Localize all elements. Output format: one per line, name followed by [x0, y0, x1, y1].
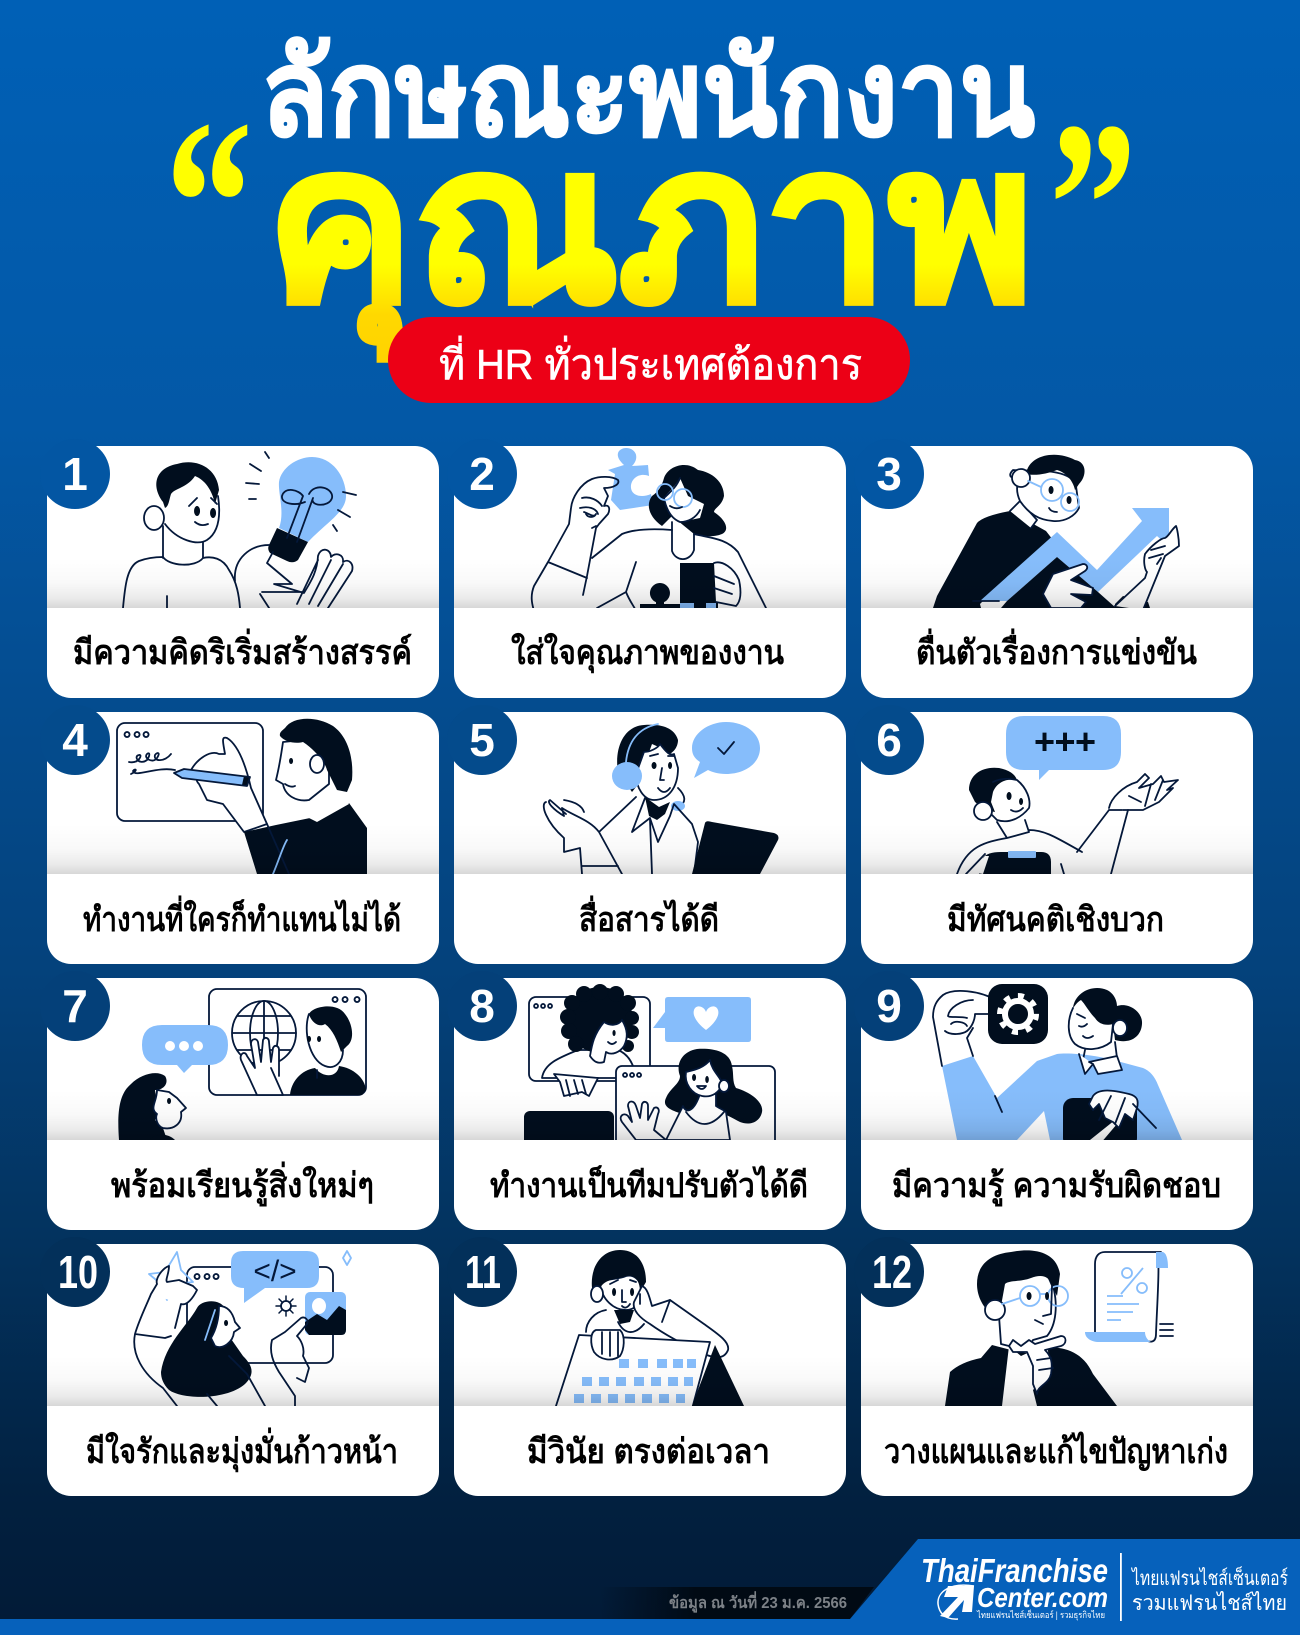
- footer: tagline: [1130, 1565, 1288, 1615]
- card 2: [447, 439, 846, 698]
- image shadow band: [454, 1090, 846, 1140]
- number badge: [40, 971, 110, 1041]
- image shadow band: [861, 1356, 1253, 1406]
- number badge: [40, 439, 110, 509]
- image shadow band: [861, 1090, 1253, 1140]
- illustration: call-centre agent: [544, 722, 778, 874]
- illustration: man leaning on calendar: [555, 1250, 744, 1409]
- number badge: 8: [469, 980, 495, 1032]
- number badge: [854, 705, 924, 775]
- illustration: team on video windows: [524, 984, 775, 1146]
- footer: logo: [921, 1552, 1108, 1621]
- footer: date band: ข้อมูล ณ วันที่ 23 ม.ค. 2566: [669, 1591, 847, 1614]
- image shadow band: [454, 558, 846, 608]
- number badge: [854, 971, 924, 1041]
- card 4: [40, 705, 439, 964]
- card 5: [447, 705, 846, 964]
- image shadow band: [861, 824, 1253, 874]
- number badge: [854, 1237, 924, 1307]
- footer: divider: [1120, 1553, 1122, 1621]
- card 12: [854, 1237, 1253, 1496]
- label: ทำงานที่ใครก็ทำแทนไม่ได้: [83, 895, 401, 939]
- image shadow band: [47, 558, 439, 608]
- number badge: [40, 705, 110, 775]
- number badge: 12: [872, 1246, 912, 1298]
- label: มีใจรักและมุ่งมั่นก้าวหน้า: [86, 1427, 398, 1473]
- image shadow band: [47, 1090, 439, 1140]
- illustration: man with light bulb: [123, 452, 356, 611]
- card 9: [854, 971, 1253, 1230]
- card 8: [447, 971, 846, 1230]
- number badge: [447, 1237, 517, 1307]
- number badge: [447, 705, 517, 775]
- footer: tagline: รวมแฟรนไชส์ไทย: [1132, 1591, 1287, 1615]
- illustration: person with gear tile: [933, 984, 1182, 1148]
- icon: logo arrow: [938, 1585, 974, 1619]
- illustration: creative woman with code window: </>: [253, 1255, 297, 1288]
- illustration: thinking man with document: [945, 1250, 1173, 1406]
- label: ใส่ใจคุณภาพของงาน: [511, 632, 784, 674]
- footer: logo: ThaiFranchise: [921, 1552, 1108, 1589]
- label: ตื่นตัวเรื่องการแข่งขัน: [916, 628, 1197, 672]
- title: closing quote: ”: [1049, 72, 1137, 338]
- subtitle pill: [388, 317, 910, 403]
- number badge: 5: [469, 714, 495, 766]
- image shadow band: [861, 558, 1253, 608]
- number badge: 1: [62, 448, 88, 500]
- illustration: positive man with speech bubble: [957, 716, 1178, 874]
- number badge: [447, 971, 517, 1041]
- number badge: 9: [876, 980, 902, 1032]
- illustration: creative woman with code window: [134, 1251, 351, 1406]
- image shadow band: [454, 824, 846, 874]
- illustration: woman with puzzle pieces: [532, 448, 766, 611]
- number badge: 4: [62, 714, 88, 766]
- label: มีความรู้ ความรับผิดชอบ: [892, 1167, 1221, 1207]
- illustration: positive man with speech bubble: +++: [1034, 721, 1096, 762]
- title: first line: ลักษณะพนักงาน: [261, 27, 1035, 161]
- number badge: [40, 1237, 110, 1307]
- label: วางแผนและแก้ไขปัญหาเก่ง: [884, 1431, 1228, 1472]
- image shadow band: [454, 1356, 846, 1406]
- label: มีวินัย ตรงต่อเวลา: [527, 1433, 770, 1471]
- number badge: 10: [58, 1246, 98, 1298]
- card 3: [854, 439, 1253, 698]
- number badge: 6: [876, 714, 902, 766]
- footer: blue strip and tab: [0, 1539, 1300, 1635]
- footer: logo: ไทยแฟรนไชส์เซ็นเตอร์ | รวมธุรกิจไทย: [976, 1608, 1105, 1621]
- title: opening quote: “: [165, 70, 253, 336]
- label: พร้อมเรียนรู้สิ่งใหม่ๆ: [111, 1161, 374, 1207]
- number badge: 11: [465, 1246, 501, 1298]
- illustration: man with rising arrow: [933, 455, 1179, 610]
- card 10: [40, 1237, 439, 1496]
- image shadow band: [47, 1356, 439, 1406]
- title: highlighted word: คุณภาพ: [266, 104, 1034, 361]
- number badge: 2: [469, 448, 495, 500]
- number badge: [854, 439, 924, 509]
- card 6: [854, 705, 1253, 964]
- label: ทำงานเป็นทีมปรับตัวได้ดี: [490, 1164, 808, 1205]
- number badge: 7: [62, 980, 88, 1032]
- illustration: man writing on a board: [117, 719, 367, 874]
- card 1: [40, 439, 439, 698]
- image shadow band: [47, 824, 439, 874]
- footer: date band: [600, 1587, 874, 1619]
- label: มีทัศนคติเชิงบวก: [947, 901, 1164, 939]
- card 7: [40, 971, 439, 1230]
- number badge: [447, 439, 517, 509]
- subtitle pill: ที่ HR ทั่วประเทศต้องการ: [439, 336, 862, 388]
- illustration: video call and globe: [118, 989, 366, 1140]
- number badge: 3: [876, 448, 902, 500]
- label: สื่อสารได้ดี: [579, 895, 719, 939]
- label: มีความคิดริเริ่มสร้างสรรค์: [73, 628, 412, 672]
- footer: logo: Center.com: [977, 1582, 1108, 1613]
- card 11: [447, 1237, 846, 1496]
